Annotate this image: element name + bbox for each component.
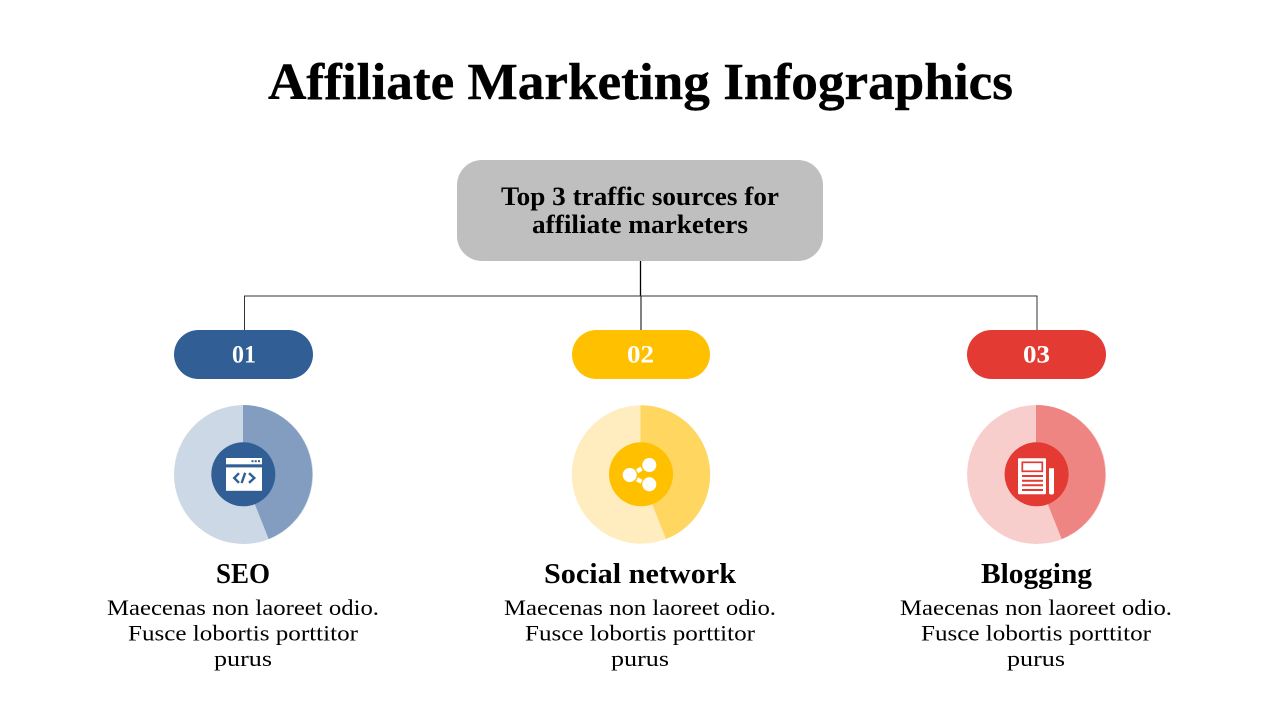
pill: 01: 01 [232,342,256,368]
icon: share nodes [623,458,656,491]
pill: 02: 02 [627,342,654,368]
column: Social network [504,330,776,671]
description: Social network: Fusce lobortis porttitor [525,620,756,646]
pie chart: Blogging [967,405,1106,544]
pie chart: Social network [572,405,710,544]
description: Blogging: purus [1007,646,1065,671]
pill: 02 [572,330,710,379]
description: SEO: Fusce lobortis porttitor [128,620,359,646]
central box: top 3 traffic sources: affiliate marketers [532,210,748,239]
central box: top 3 traffic sources: Top 3 traffic sources for [501,182,779,211]
central box: top 3 traffic sources [457,160,823,261]
description: SEO: purus [214,646,272,671]
connector lines [244,261,1037,330]
description: Blogging: Fusce lobortis porttitor [921,620,1152,646]
column: SEO [107,330,379,671]
pill: 03: 03 [1023,342,1050,368]
description: Blogging: Maecenas non laoreet odio. [900,595,1172,620]
icon: code window [226,458,262,491]
description: Social network: purus [611,646,669,671]
description: Social network [504,595,776,671]
icon: newspaper [1018,458,1054,494]
heading: SEO: SEO [216,559,270,590]
description: SEO: Maecenas non laoreet odio. [107,595,379,620]
pill: 01 [174,330,313,379]
heading: Blogging: Blogging [981,559,1092,590]
title: Affiliate Marketing Infographics [268,54,1013,111]
column: Blogging [900,330,1172,671]
description: Blogging [900,595,1172,671]
description: Social network: Maecenas non laoreet odio. [504,595,776,620]
heading: Social network: Social network [544,559,736,590]
pie chart: SEO [174,405,313,544]
pill: 03 [967,330,1106,379]
description: SEO [107,595,379,671]
